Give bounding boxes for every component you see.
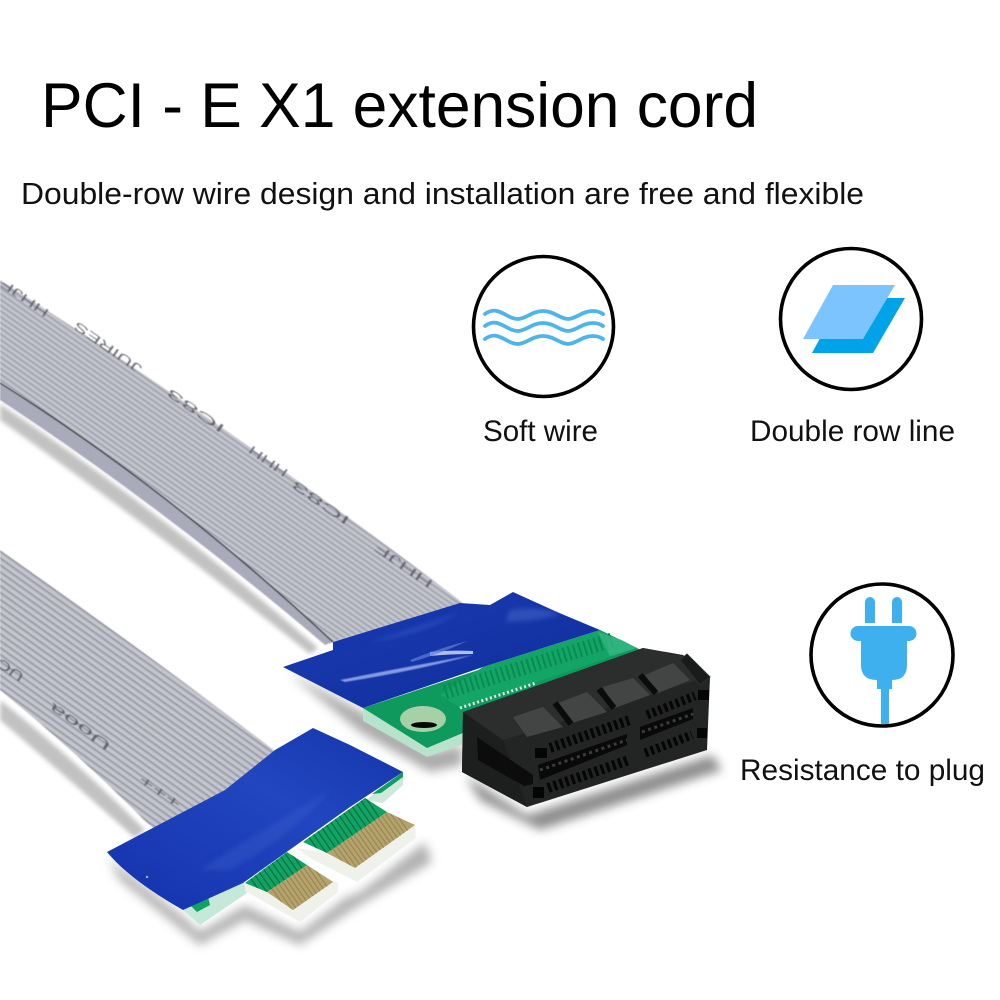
socket pin rows [548, 696, 695, 788]
cable print marks: HHJF [372, 541, 436, 591]
board mounting hole [400, 706, 446, 732]
label: double row line: Double row line [750, 415, 955, 448]
board right tab [366, 772, 403, 803]
product: lower ribbon cable with edge connector [0, 550, 432, 945]
icon: waves in circle [474, 256, 614, 396]
upper green circuit board [363, 630, 645, 757]
subtitle: Double-row wire design and installation are free and flexible [21, 176, 864, 211]
label: soft wire: Soft wire [483, 415, 598, 448]
product: upper ribbon cable with socket [0, 276, 722, 830]
cable print marks: IC83 [163, 385, 228, 436]
socket side nub [680, 654, 710, 685]
board left slab [183, 880, 247, 925]
PCIe x1 black socket [462, 648, 722, 830]
cable print marks: Uooa [45, 699, 114, 754]
left gold finger [245, 855, 338, 922]
cable print marks: IC83 [288, 477, 353, 528]
cable print marks [0, 655, 184, 812]
lower blue tape [107, 728, 403, 910]
upper ribbon cable [0, 276, 463, 645]
socket top facet [463, 648, 707, 740]
label: resistance to plug: Resistance to plug [740, 754, 985, 787]
shadow: upper board [288, 672, 462, 772]
cable print marks: HHJF [0, 276, 52, 320]
socket latch bumps [513, 663, 690, 737]
green traces [245, 852, 307, 892]
cable print marks: UC [0, 655, 27, 685]
icon: plug in circle [811, 584, 953, 726]
socket left side [462, 712, 527, 807]
feature: soft wire [474, 256, 614, 448]
cable print marks: +++ [136, 772, 184, 812]
right gold finger [297, 812, 416, 882]
icon: stacked sheets in circle [780, 248, 922, 390]
shadow: socket [465, 755, 722, 830]
lower ribbon cable [0, 550, 275, 840]
feature: double row line [750, 248, 955, 448]
cable print marks: HHH [246, 443, 291, 480]
feature: resistance to plug [740, 584, 985, 787]
title: PCI - E X1 extension cord [41, 71, 758, 141]
shadow: lower board and fingers [108, 842, 432, 945]
upper blue tape [283, 592, 600, 708]
cable print marks [0, 276, 436, 591]
lower circuit board [183, 772, 416, 925]
cable print marks: JUIRES [71, 319, 145, 376]
